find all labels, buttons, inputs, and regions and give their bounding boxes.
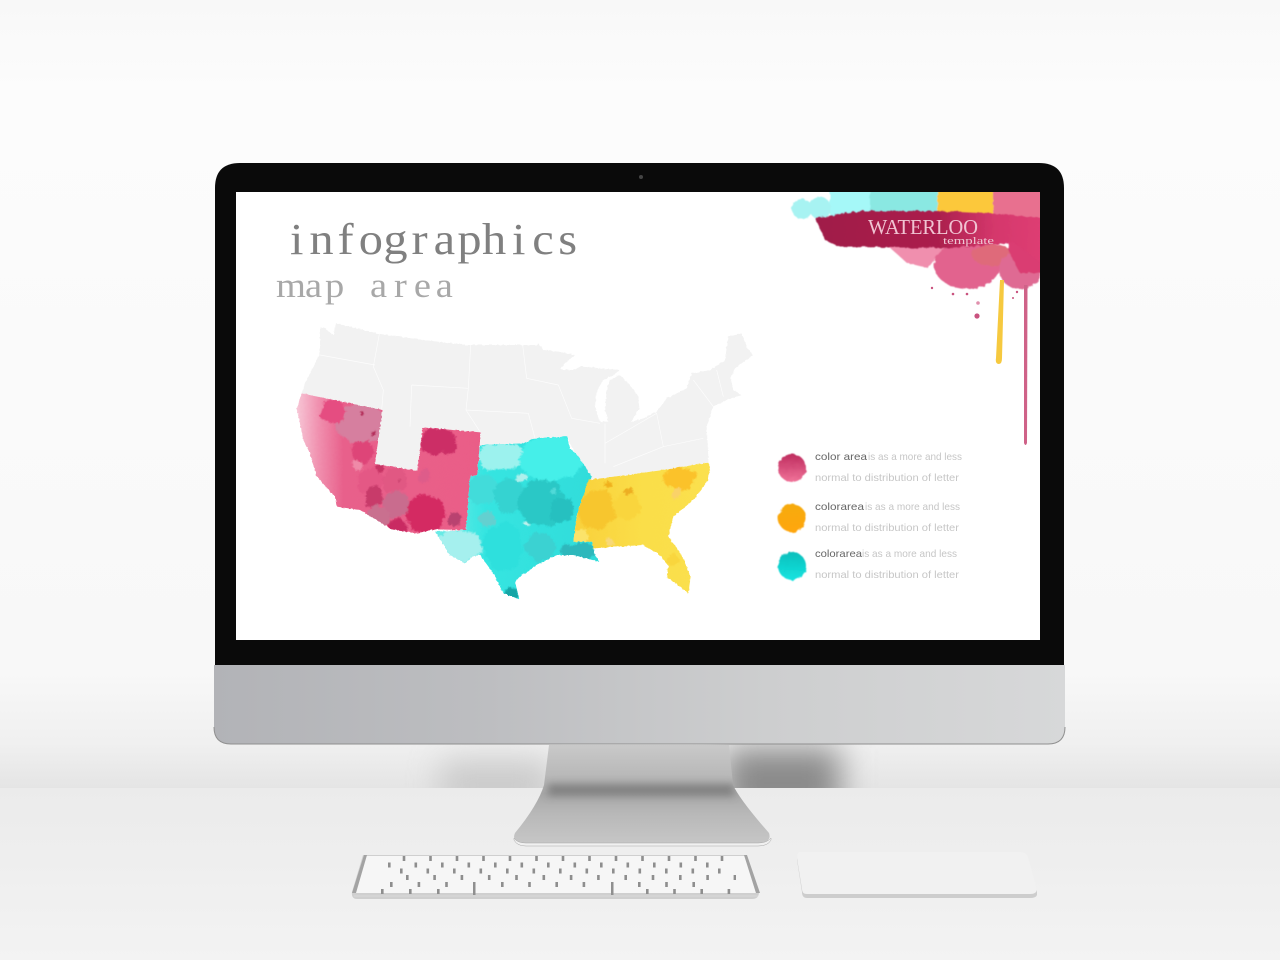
legend item: teal: normal to distribution of letter: [815, 569, 960, 581]
drips: [996, 280, 1004, 364]
legend item: pink: color area: [815, 451, 867, 463]
grey base states: [302, 323, 753, 480]
legend item: teal: [778, 548, 960, 581]
trackpad: [797, 852, 1037, 898]
legend item: pink: normal to distribution of letter: [815, 472, 960, 484]
keyboard: [352, 855, 760, 899]
monitor body: [214, 163, 1065, 744]
teal region: [433, 435, 600, 602]
banner title: WATERLOO: [868, 215, 978, 239]
legend item: orange: [778, 501, 960, 534]
title: infographics: [290, 216, 577, 264]
webcam: [639, 175, 643, 179]
screen: [236, 192, 1040, 640]
background: wall and desk: [0, 744, 1280, 810]
pink region: [293, 390, 483, 537]
monitor stand: [514, 745, 771, 846]
legend item: orange: colorarea: [815, 501, 864, 513]
legend item: orange: normal to distribution of letter: [815, 522, 960, 534]
state borders: [320, 334, 723, 467]
legend item: pink: [778, 451, 962, 484]
legend item: teal: is as a more and less: [862, 548, 957, 560]
subtitle: map area: [276, 266, 453, 305]
legend item: teal: colorarea: [815, 548, 862, 560]
paint splash: top right corner: [792, 185, 1045, 445]
yellow region: [570, 460, 713, 597]
map of the United States: [293, 323, 753, 602]
banner subtitle: template: [943, 235, 994, 247]
legend: [778, 451, 962, 581]
splatter dots: [931, 287, 1018, 319]
brush stroke banner: [814, 209, 1040, 250]
legend item: pink: is as a more and less: [868, 451, 962, 463]
legend item: orange: is as a more and less: [865, 501, 960, 513]
